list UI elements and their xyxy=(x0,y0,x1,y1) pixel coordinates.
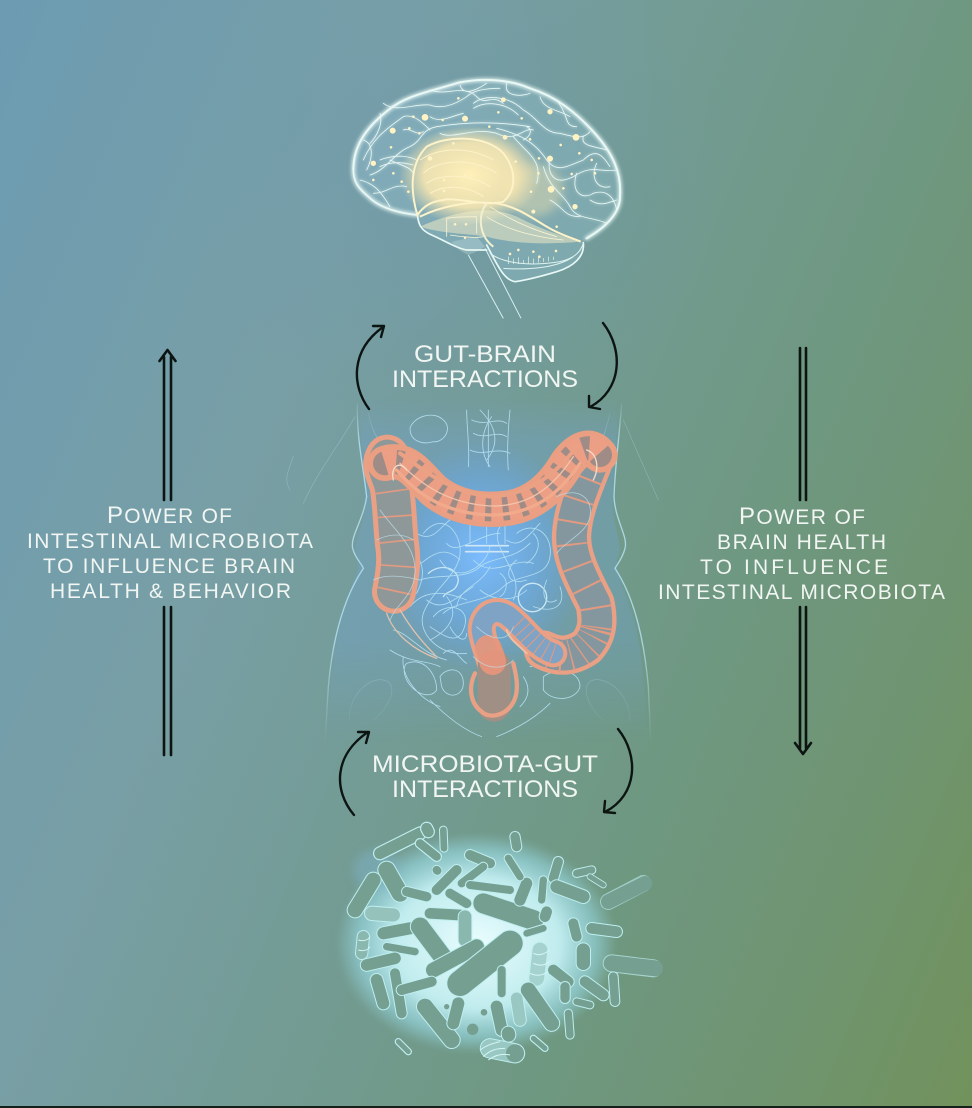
text: power of brain health: INTESTINAL MICROBIOTA xyxy=(658,581,945,604)
cecum tail xyxy=(387,610,437,658)
label: gut-brain interactions xyxy=(392,341,578,393)
sigmoid colon xyxy=(482,612,553,705)
abdominal glow xyxy=(378,440,585,673)
arrow: up double arrow, upper segment xyxy=(160,350,176,500)
body outline xyxy=(325,403,651,743)
text: power of brain health: POWER OF xyxy=(739,503,865,530)
text: power of intestinal microbiota: HEALTH & BEHAVIOR xyxy=(50,580,291,603)
label: microbiota-gut interactions: INTERACTIONS xyxy=(392,776,578,803)
text: power of brain health: BRAIN HEALTH xyxy=(717,531,886,554)
label: microbiota-gut interactions: MICROBIOTA-GUT xyxy=(372,751,598,778)
icon: bacteria cluster xyxy=(337,828,655,1062)
descending colon xyxy=(543,457,597,656)
rectum outline xyxy=(471,663,517,716)
arrow: microbiota-gut left curve xyxy=(340,732,369,815)
text: power of intestinal microbiota: POWER OF xyxy=(107,502,232,529)
transverse colon xyxy=(385,447,600,515)
label: microbiota-gut interactions xyxy=(372,751,598,803)
icon: brain xyxy=(353,80,620,318)
text: power of intestinal microbiota: TO INFLUENCE BRAIN xyxy=(43,555,295,578)
arrow: gut-brain left curve xyxy=(357,326,384,409)
arrow: up double arrow, lower segment xyxy=(164,607,171,755)
ascending colon xyxy=(385,457,398,592)
label: gut-brain interactions: INTERACTIONS xyxy=(392,366,578,393)
faint arm lines xyxy=(287,417,658,503)
text: power of intestinal microbiota xyxy=(27,502,313,603)
arrow: microbiota-gut right curve xyxy=(604,729,632,813)
bottom border line xyxy=(0,1106,972,1108)
large intestine xyxy=(373,447,600,716)
body silhouette fill xyxy=(330,413,646,712)
organs and tangled vessels xyxy=(390,410,587,737)
label: gut-brain interactions: GUT-BRAIN xyxy=(414,341,556,368)
text: power of intestinal microbiota: INTESTINAL MICROBIOTA xyxy=(27,530,313,553)
arrow: down double arrow, lower segment xyxy=(795,607,811,754)
text: power of brain health: TO INFLUENCE xyxy=(700,556,888,579)
light vessels crossing colon xyxy=(373,493,590,667)
arrow: gut-brain right curve xyxy=(589,323,617,409)
text: power of brain health xyxy=(658,503,945,604)
icon: torso with intestines xyxy=(287,400,658,743)
arrow: down double arrow, upper segment xyxy=(800,348,806,500)
